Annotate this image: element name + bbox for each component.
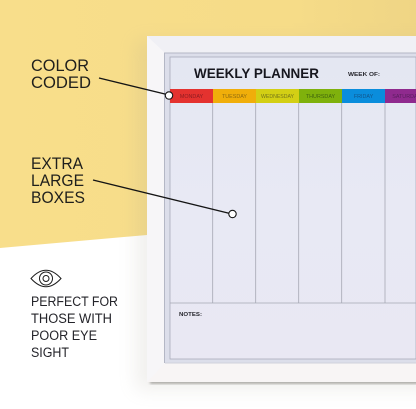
day header: friday: FRIDAY [354, 94, 374, 100]
callout text: color coded: CODED [31, 73, 91, 92]
arrow: extra large boxes pointer [93, 180, 236, 218]
text block: perfect for those with poor eye sight: PERFECT FOR [31, 294, 118, 309]
day header: thursday [299, 89, 342, 103]
callout text: extra large boxes: BOXES [31, 188, 85, 207]
day header: wednesday [256, 89, 299, 103]
arrow: color coded pointer [99, 78, 173, 99]
day header: saturday [385, 89, 416, 103]
day header: thursday: THURSDAY [306, 94, 336, 100]
callout text: color coded [31, 56, 91, 92]
callout text: extra large boxes [31, 154, 85, 207]
day header: tuesday [213, 89, 256, 103]
day header: monday: MONDAY [180, 94, 204, 100]
panel: white frame [147, 36, 416, 382]
panel: planner board [170, 57, 416, 359]
white frame soft shadow [136, 40, 416, 390]
day header: tuesday: TUESDAY [222, 94, 247, 100]
day header: monday [170, 89, 213, 103]
text block: perfect for those with poor eye sight: THOSE WITH [31, 311, 112, 326]
callout text: color coded: COLOR [31, 56, 89, 75]
white frame contact shadow [150, 374, 416, 384]
label: notes: NOTES: [179, 312, 202, 318]
column grid lines [170, 103, 416, 303]
day header: friday [342, 89, 385, 103]
text block: perfect for those with poor eye sight: SIGHT [31, 345, 69, 360]
yellow background [0, 0, 416, 248]
text block: perfect for those with poor eye sight [31, 294, 118, 360]
heading: weekly planner: WEEKLY PLANNER [194, 66, 319, 81]
callout text: extra large boxes: LARGE [31, 171, 84, 190]
icon: eye [31, 270, 61, 287]
text block: perfect for those with poor eye sight: POOR EYE [31, 328, 97, 343]
callout text: extra large boxes: EXTRA [31, 154, 84, 173]
day header: wednesday: WEDNESDAY [261, 94, 295, 100]
label: week of: WEEK OF: [348, 72, 380, 78]
